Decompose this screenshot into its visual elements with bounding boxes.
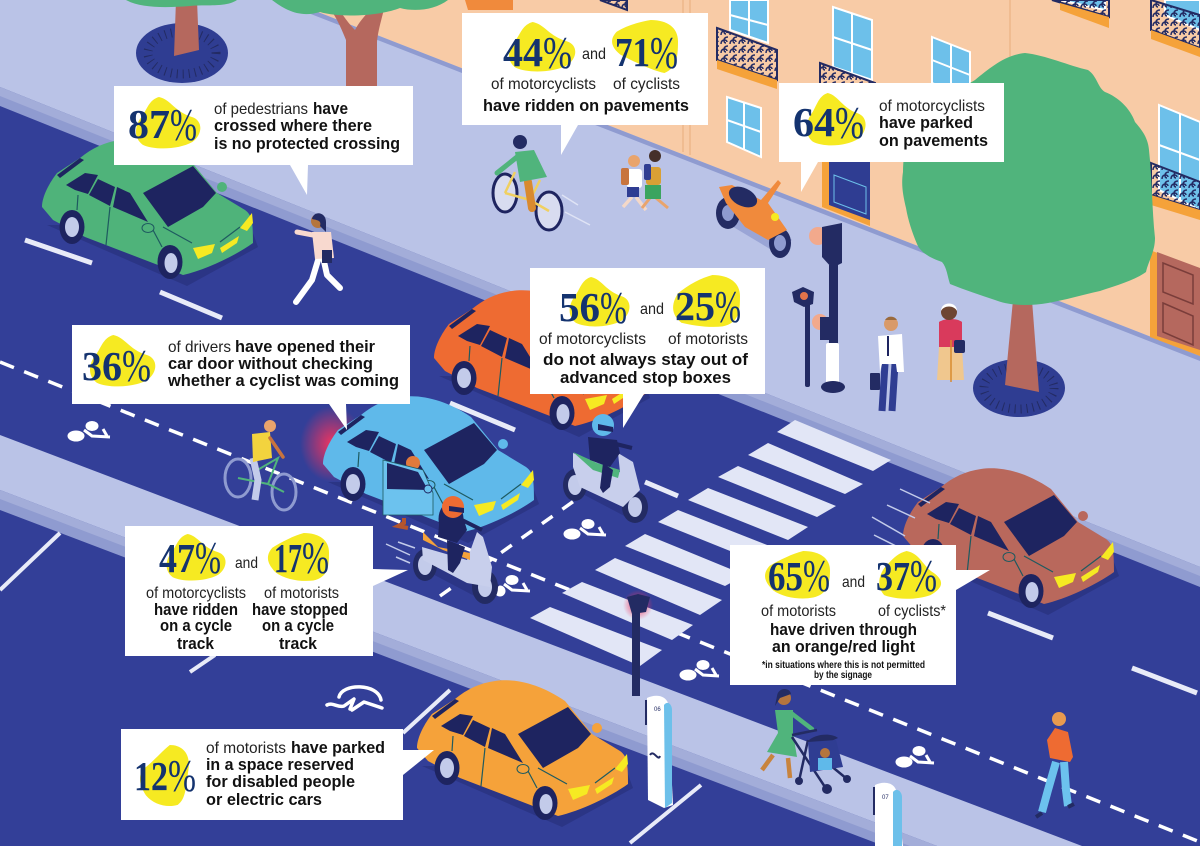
callout: pedestrians: 87 [128,101,170,147]
callout: parked on pavements: % [835,97,864,148]
callout: cycle track: have stopped [252,601,348,619]
callout: orange/red light: an orange/red light [772,638,915,656]
callout: cycle track: 17 [274,535,302,581]
callout: car door: 36 [82,343,122,389]
tree: large [902,53,1155,417]
tree: top centre [272,0,448,86]
charging point 06 [646,696,673,808]
orange-yellow car [417,680,633,827]
callout: cycle track: have ridden [154,601,238,619]
callout: cycle track: track [177,635,215,653]
speed lines: brown car [872,489,930,546]
door: blue [822,155,870,226]
man with briefcase [870,317,904,411]
callout: reserved parking: in a space reserved [206,756,354,774]
callout: car door: of drivers [168,339,231,356]
dashed line crossing the road [440,501,574,596]
callout: parked on pavements: on pavements [879,132,988,150]
callout: reserved parking: for disabled people [206,773,355,791]
top cyclist [493,135,590,230]
callout: pedestrians: crossed where there [214,117,372,135]
lane markings [0,240,1197,843]
callout: ridden on pavements: 71 [615,29,650,75]
callout: parked on pavements: of motorcyclists [879,98,985,115]
callout: advanced stop boxes: of motorists [668,331,748,348]
callout: orange/red light: have driven through [770,621,917,639]
callout: ridden on pavements: of motorcyclists [491,76,596,93]
callout: ridden on pavements: and [582,46,606,63]
callout: pedestrians: is no protected crossing [214,135,400,153]
callout: parked on pavements [779,83,1004,192]
upper pavement [0,0,1200,567]
two children walking [621,150,668,210]
callout: advanced stop boxes: 25 [675,283,715,329]
charging point 07 [874,783,903,846]
callout: reserved parking: have parked [291,739,385,757]
callout: orange/red light: *in situations where this is not permitted [762,659,925,671]
older woman with cane [937,304,965,382]
charging point 06: 06 [654,707,661,713]
callout: cycle track: of motorists [264,585,339,602]
callout: cycle track: and [235,555,258,572]
callout: cycle track: of motorcyclists [146,585,246,602]
cycle lane dashed line [0,362,1200,842]
callout: orange/red light [730,545,990,685]
cyclist on cycle lane [225,420,296,510]
callout: car door: % [122,340,151,391]
callout: advanced stop boxes: % [600,282,627,333]
callout: parked on pavements: have parked [879,114,973,132]
callout: pedestrians: of pedestrians [214,101,308,118]
callout: ridden on pavements: % [650,27,678,78]
callout: car door: car door without checking [168,355,373,373]
traffic light: crossing [623,590,653,696]
callout: pedestrians [114,86,413,195]
callout: orange/red light: and [842,574,865,591]
blue car with open door [323,396,539,543]
callout: ridden on pavements: 44 [503,29,543,75]
callout: orange/red light: of motorists [761,603,836,620]
callout: orange/red light: % [803,550,830,601]
callout: orange/red light: 65 [768,553,803,599]
woman with stroller [762,689,851,794]
pedestrian woman crossing [296,213,340,302]
open car door [383,456,433,528]
lower pavement [0,435,1082,846]
callout: orange/red light: by the signage [814,669,872,681]
callout: cycle track: % [195,532,221,583]
callout: pedestrians: have [313,100,348,118]
lower kerb [0,490,937,846]
callout: advanced stop boxes: and [640,301,664,318]
callout: advanced stop boxes [530,268,765,428]
callout: advanced stop boxes: advanced stop boxes [560,369,731,387]
callout: orange/red light: of cyclists* [878,603,946,620]
windows [727,0,1200,210]
callout: reserved parking: or electric cars [206,791,322,809]
orange scooter parked [716,180,792,258]
callout: advanced stop boxes: 56 [559,284,600,330]
motorcyclist orange helmet [386,496,500,604]
callout: reserved parking: % [168,750,196,801]
callout: ridden on pavements [462,13,708,155]
callout: car door [72,325,410,430]
callout: reserved parking [121,729,434,820]
callout: car door: whether a cyclist was coming [167,372,399,390]
building facade [280,0,1200,361]
callout: advanced stop boxes: of motorcyclists [539,331,646,348]
callout: orange/red light: 37 [876,553,910,599]
disabled parking symbol [327,687,382,710]
callout: car door: have opened their [235,338,376,356]
callout: parked on pavements: 64 [793,99,835,145]
traffic light: tall [809,223,845,393]
callout: orange/red light: % [910,550,937,601]
callout: cycle track: 47 [159,535,195,581]
callout: cycle track: on a cycle [160,617,232,635]
pedestrian crossing [530,420,891,666]
callout: cycle track [125,526,408,656]
motorcyclist blue helmet [563,414,648,523]
door: brown [1150,250,1200,356]
callout: cycle track: track [279,635,318,653]
callout: pedestrians: % [170,99,197,150]
callout: cycle track: on a cycle [262,617,334,635]
callout: cycle track: % [302,532,329,583]
green car [42,139,258,286]
tree: top left [126,0,237,83]
upper kerb [0,87,1200,587]
callout: advanced stop boxes: % [715,281,741,332]
brown car [903,468,1119,615]
balconies [600,0,1200,210]
man walking away [1036,712,1074,817]
cycle lane symbols [68,422,934,767]
callout: advanced stop boxes: do not always stay out of [543,351,749,369]
callout: reserved parking: 12 [134,753,168,799]
charging point 07: 07 [882,795,889,801]
traffic light: small [792,287,814,387]
callout: ridden on pavements: have ridden on pavements [483,97,689,115]
orange-red car [434,290,650,437]
callout: ridden on pavements: % [543,27,572,78]
brake light glow [300,406,364,482]
callout: ridden on pavements: of cyclists [613,76,680,93]
callout: reserved parking: of motorists [206,740,286,757]
